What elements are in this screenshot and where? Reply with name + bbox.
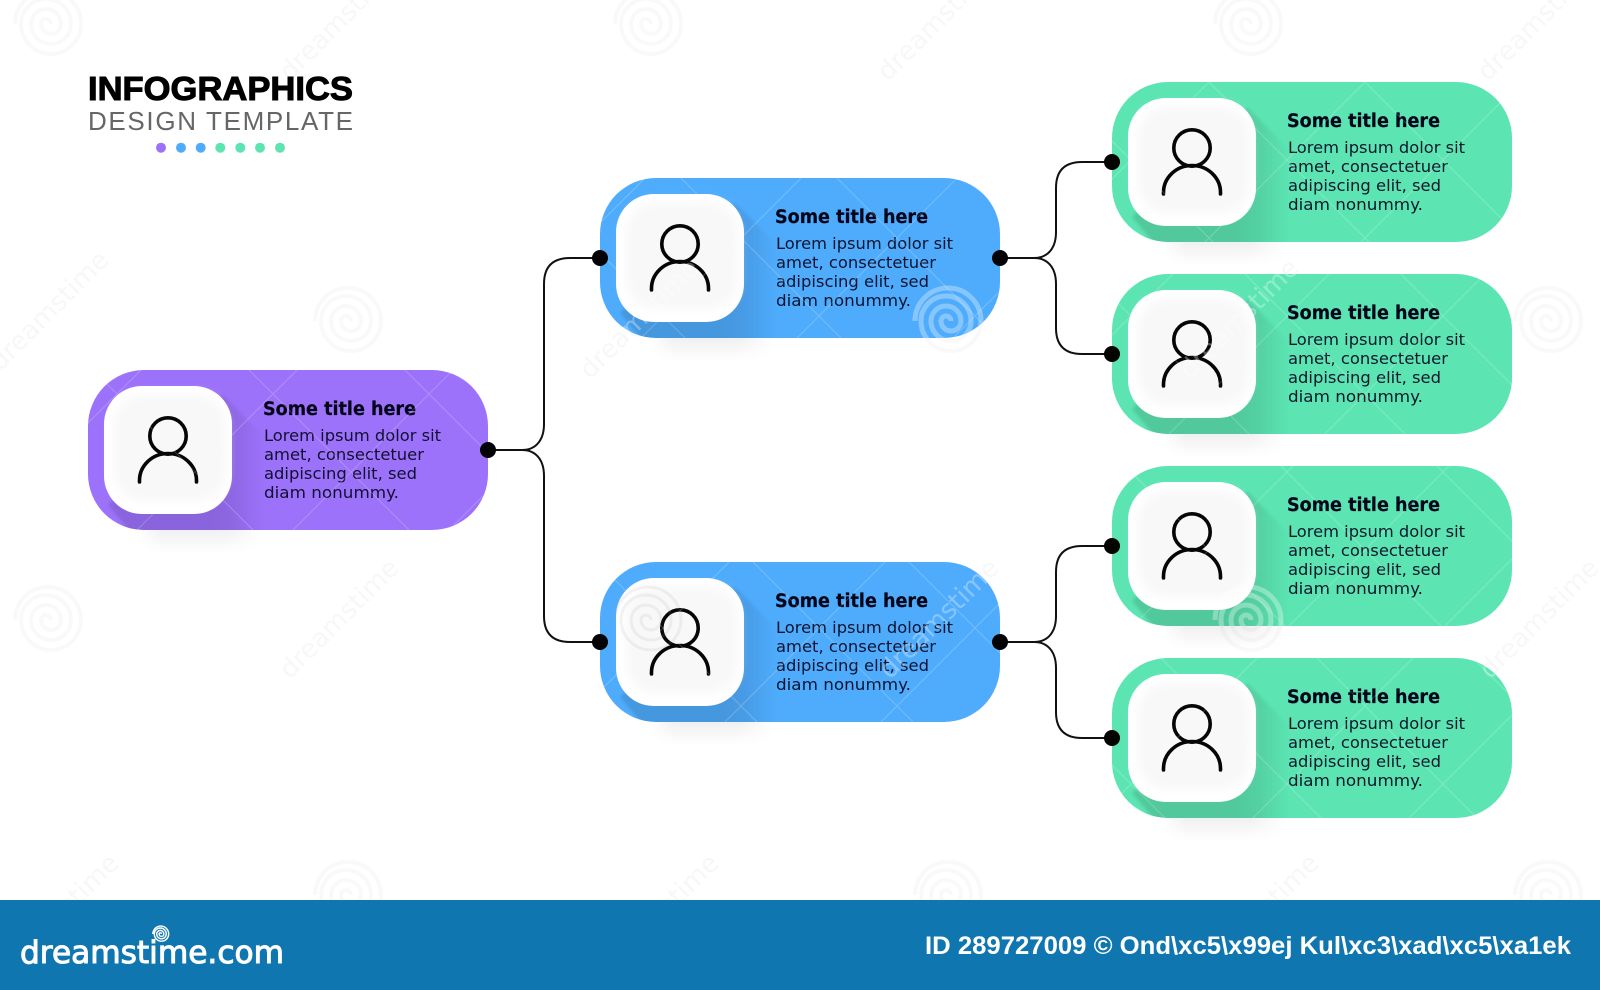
icon: person tile [1128, 98, 1256, 226]
card body text [776, 234, 953, 310]
watermark: light marks over the cards: dreamstime [874, 553, 1005, 685]
credit line: ID 289727009 © Ond\xc5\x99ej Kul\xc3\xad\xc5\xa1ek [925, 932, 1571, 960]
card body text: diam nonummy. [1288, 579, 1423, 598]
card title: Some title here [775, 207, 928, 228]
panel: green card 3 [1112, 466, 1512, 648]
watermark: faint marks on white background: dreamstime [274, 553, 405, 685]
card body text: amet, consectetuer [776, 637, 936, 656]
card body text: Lorem ipsum dolor sit [1288, 330, 1465, 349]
logo: dreamstime.com: dreamstime.com [20, 935, 284, 971]
card body text: diam nonummy. [776, 291, 911, 310]
icon: person tile [1128, 290, 1256, 418]
card body text: amet, consectetuer [776, 253, 936, 272]
card body text: adipiscing elit, sed [776, 656, 929, 675]
card body text: diam nonummy. [1288, 195, 1423, 214]
watermark: faint marks on white background: dreamstime [1194, 848, 1325, 980]
watermark: light marks over the cards [88, 82, 1600, 818]
card body text: Lorem ipsum dolor sit [1288, 714, 1465, 733]
card body text: Lorem ipsum dolor sit [264, 426, 441, 445]
card body text [1288, 138, 1465, 214]
panel: root card (purple) [88, 370, 488, 552]
watermark: light marks over the cards: dreamstime [574, 253, 705, 385]
footer banner [0, 900, 1600, 990]
connector dots [480, 154, 1120, 746]
card body text: Lorem ipsum dolor sit [776, 234, 953, 253]
card body text: diam nonummy. [264, 483, 399, 502]
coloured dots row [156, 143, 285, 153]
card body text: amet, consectetuer [1288, 349, 1448, 368]
card body text: Lorem ipsum dolor sit [776, 618, 953, 637]
card body text: Lorem ipsum dolor sit [1288, 522, 1465, 541]
card body text: amet, consectetuer [1288, 733, 1448, 752]
card body text: adipiscing elit, sed [1288, 176, 1441, 195]
watermark: faint marks on white background: dreamstime [1174, 253, 1305, 385]
icon: person tile [104, 386, 232, 514]
card body text [1288, 330, 1465, 406]
card body text: adipiscing elit, sed [1288, 752, 1441, 771]
watermark: faint marks on white background: dreamstime [874, 553, 1005, 685]
panel: green card 4 [1112, 658, 1512, 840]
card body text: amet, consectetuer [1288, 541, 1448, 560]
panel: green card 2 [1112, 274, 1512, 456]
card body text: adipiscing elit, sed [264, 464, 417, 483]
card body text: adipiscing elit, sed [1288, 368, 1441, 387]
card body text: diam nonummy. [1288, 387, 1423, 406]
card title: Some title here [1287, 495, 1440, 516]
watermark: faint marks on white background: dreamstime [574, 253, 705, 385]
card body text [1288, 714, 1465, 790]
card body text: diam nonummy. [776, 675, 911, 694]
panel: upper middle card (blue) [600, 178, 1000, 360]
card title: Some title here [1287, 111, 1440, 132]
card body text: adipiscing elit, sed [1288, 560, 1441, 579]
subheading: DESIGN TEMPLATE: DESIGN TEMPLATE [88, 106, 353, 136]
card body text [1288, 522, 1465, 598]
card body text: amet, consectetuer [264, 445, 424, 464]
panel: lower middle card (blue) [600, 562, 1000, 744]
card title: Some title here [1287, 303, 1440, 324]
card title: Some title here [263, 399, 416, 420]
card body text: Lorem ipsum dolor sit [1288, 138, 1465, 157]
card title: Some title here [1287, 687, 1440, 708]
connector lines [488, 162, 1112, 738]
icon: person tile [1128, 482, 1256, 610]
icon: person tile [1128, 674, 1256, 802]
card body text: diam nonummy. [1288, 771, 1423, 790]
icon: person tile [616, 578, 744, 706]
watermark: light marks over the cards: dreamstime [1174, 253, 1305, 385]
icon: person tile [616, 194, 744, 322]
card body text: amet, consectetuer [1288, 157, 1448, 176]
card body text [776, 618, 953, 694]
watermark: faint marks on white background: dreamstime [594, 848, 725, 980]
heading: INFOGRAPHICS: INFOGRAPHICS [88, 71, 353, 108]
card body text [264, 426, 441, 502]
card title: Some title here [775, 591, 928, 612]
card body text: adipiscing elit, sed [776, 272, 929, 291]
title block [88, 71, 353, 153]
panel: green card 1 [1112, 82, 1512, 264]
